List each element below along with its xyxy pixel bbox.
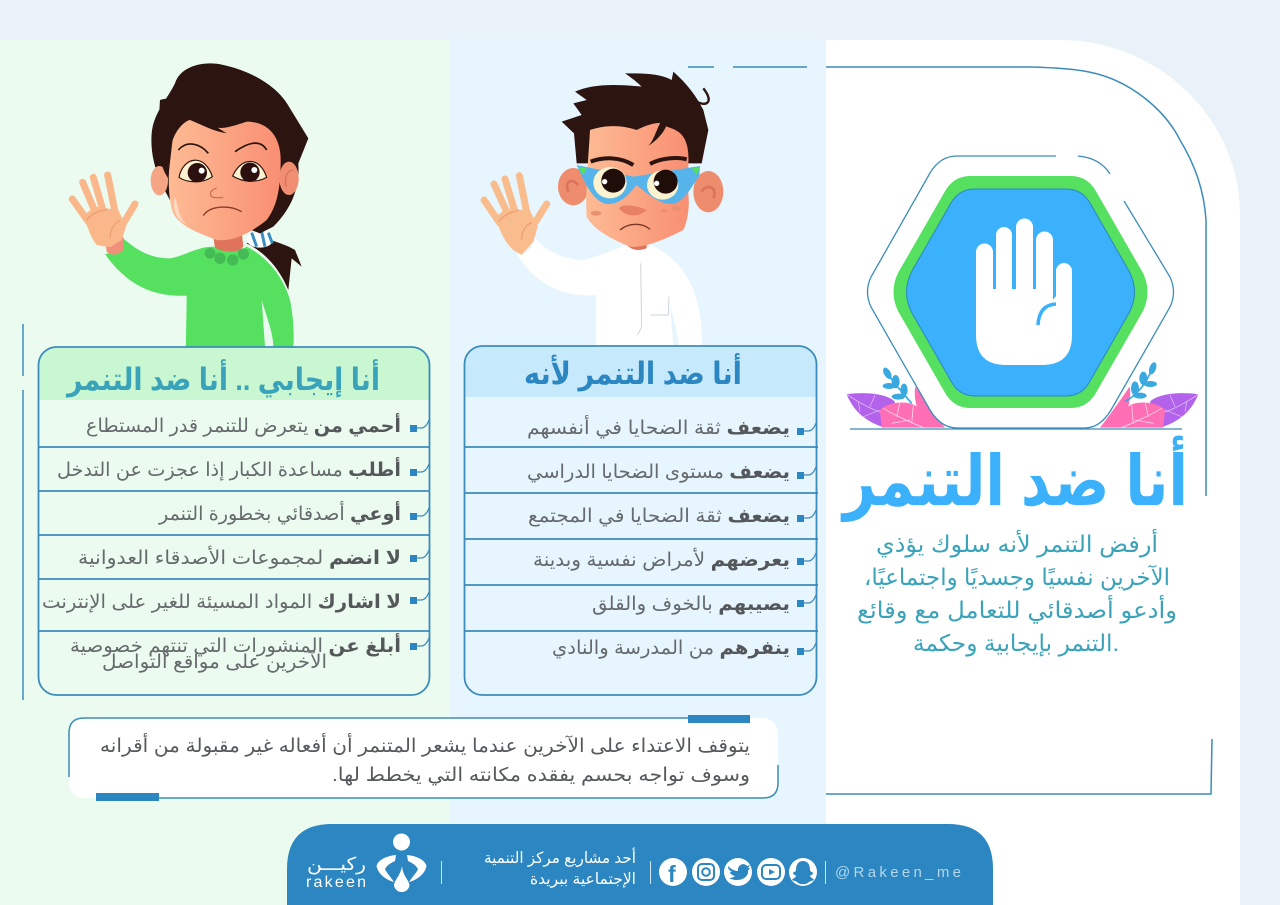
panel: white title background [826,40,1240,905]
list: reasons: يضعف ثقة الضحايا في أنفسهم [527,415,790,439]
boy hand [484,176,547,255]
decorative baseline [850,428,1182,430]
icon: facebook: f [668,861,676,887]
list: positive actions: أوعي أصدقائي بخطورة التنمر [158,501,401,525]
illustration: girl raising hand [72,63,308,347]
logo: rakeen: rakeen [306,874,366,891]
panel: blue background [450,40,826,905]
footer text: organisation: أحد مشاريع مركز التنمية [484,847,636,868]
list: positive actions: أبلغ عن المنشورات التي تنتهم خصوصية [70,633,401,657]
icon: facebook [659,858,687,887]
text block: description: .التنمر بإيجابية وحكمة [913,630,1119,657]
panel: green background [0,40,450,905]
illustration: boy with glasses raising hand [484,72,723,345]
logo: rakeen [306,834,426,892]
footer bar [287,824,993,905]
list: reasons: ينفرهم من المدرسة والنادي [552,638,790,659]
icon: instagram [692,858,720,886]
row dividers and bullets: reasons card [465,423,818,655]
list: positive actions [42,413,401,673]
icon: leaves and sprigs [847,361,1198,428]
footer text: organisation: الإجتماعية ببريدة [530,871,636,888]
list: positive actions: أطلب مساعدة الكبار إذا عجزت عن التدخل [57,457,401,482]
girl hand [72,175,135,255]
text block: description: الآخرين نفسيًا وجسديًا واجتماعيًا، [864,564,1170,591]
icon: twitter [724,858,752,886]
list: positive actions: لا انضم لمجموعات الأصدقاء العدوانية [78,546,401,569]
panel: positive actions card [38,347,430,695]
heading: reasons card: أنا ضد التنمر لأنه [524,353,742,392]
text block: description [857,529,1177,657]
text block: description: وأدعو أصدقائي للتعامل مع وقائع [857,595,1177,624]
icon: stop hexagon with hand [868,156,1174,428]
decorative outline: top right frame [23,67,1212,794]
logo: rakeen: ركيـــن [307,854,366,875]
footer text: organisation [484,847,636,888]
title: أنا ضد التنمر [841,435,1188,522]
list: reasons [527,415,790,659]
text block: description: أرفض التنمر لأنه سلوك يؤذي [876,529,1158,558]
list: reasons: يصيبهم بالخوف والقلق [592,594,790,615]
footer text: social handle: @Rakeen_me [835,864,961,881]
list: reasons: يضعف ثقة الضحايا في المجتمع [528,506,790,527]
list: reasons: يضعف مستوى الضحايا الدراسي [527,462,790,483]
callout: conclusion note: وسوف تواجه بحسم يفقده مكانته التي يخطط لها. [332,765,750,786]
callout: conclusion note: يتوقف الاعتداء على الآخرين عندما يشعر المتنمر أن أفعاله غير مقبولة من أقرانه [100,733,750,757]
icon: youtube [757,858,785,886]
row dividers and bullets: positive card [39,420,429,650]
list: reasons: يعرضهم لأمراض نفسية وبدينة [533,548,790,571]
icon: snapchat [789,858,817,886]
heading: positive card: أنا إيجابي .. أنا ضد التنمر [65,359,380,398]
list: positive actions: أحمي من يتعرض للتنمر قدر المستطاع [86,413,401,437]
panel: reasons card [464,346,818,695]
list: positive actions: الآخرين على مواقع التواصل [102,651,327,673]
callout: conclusion note [69,715,778,801]
list: positive actions: لا اشارك المواد المسيئة للغير على الإنترنت [42,592,401,613]
